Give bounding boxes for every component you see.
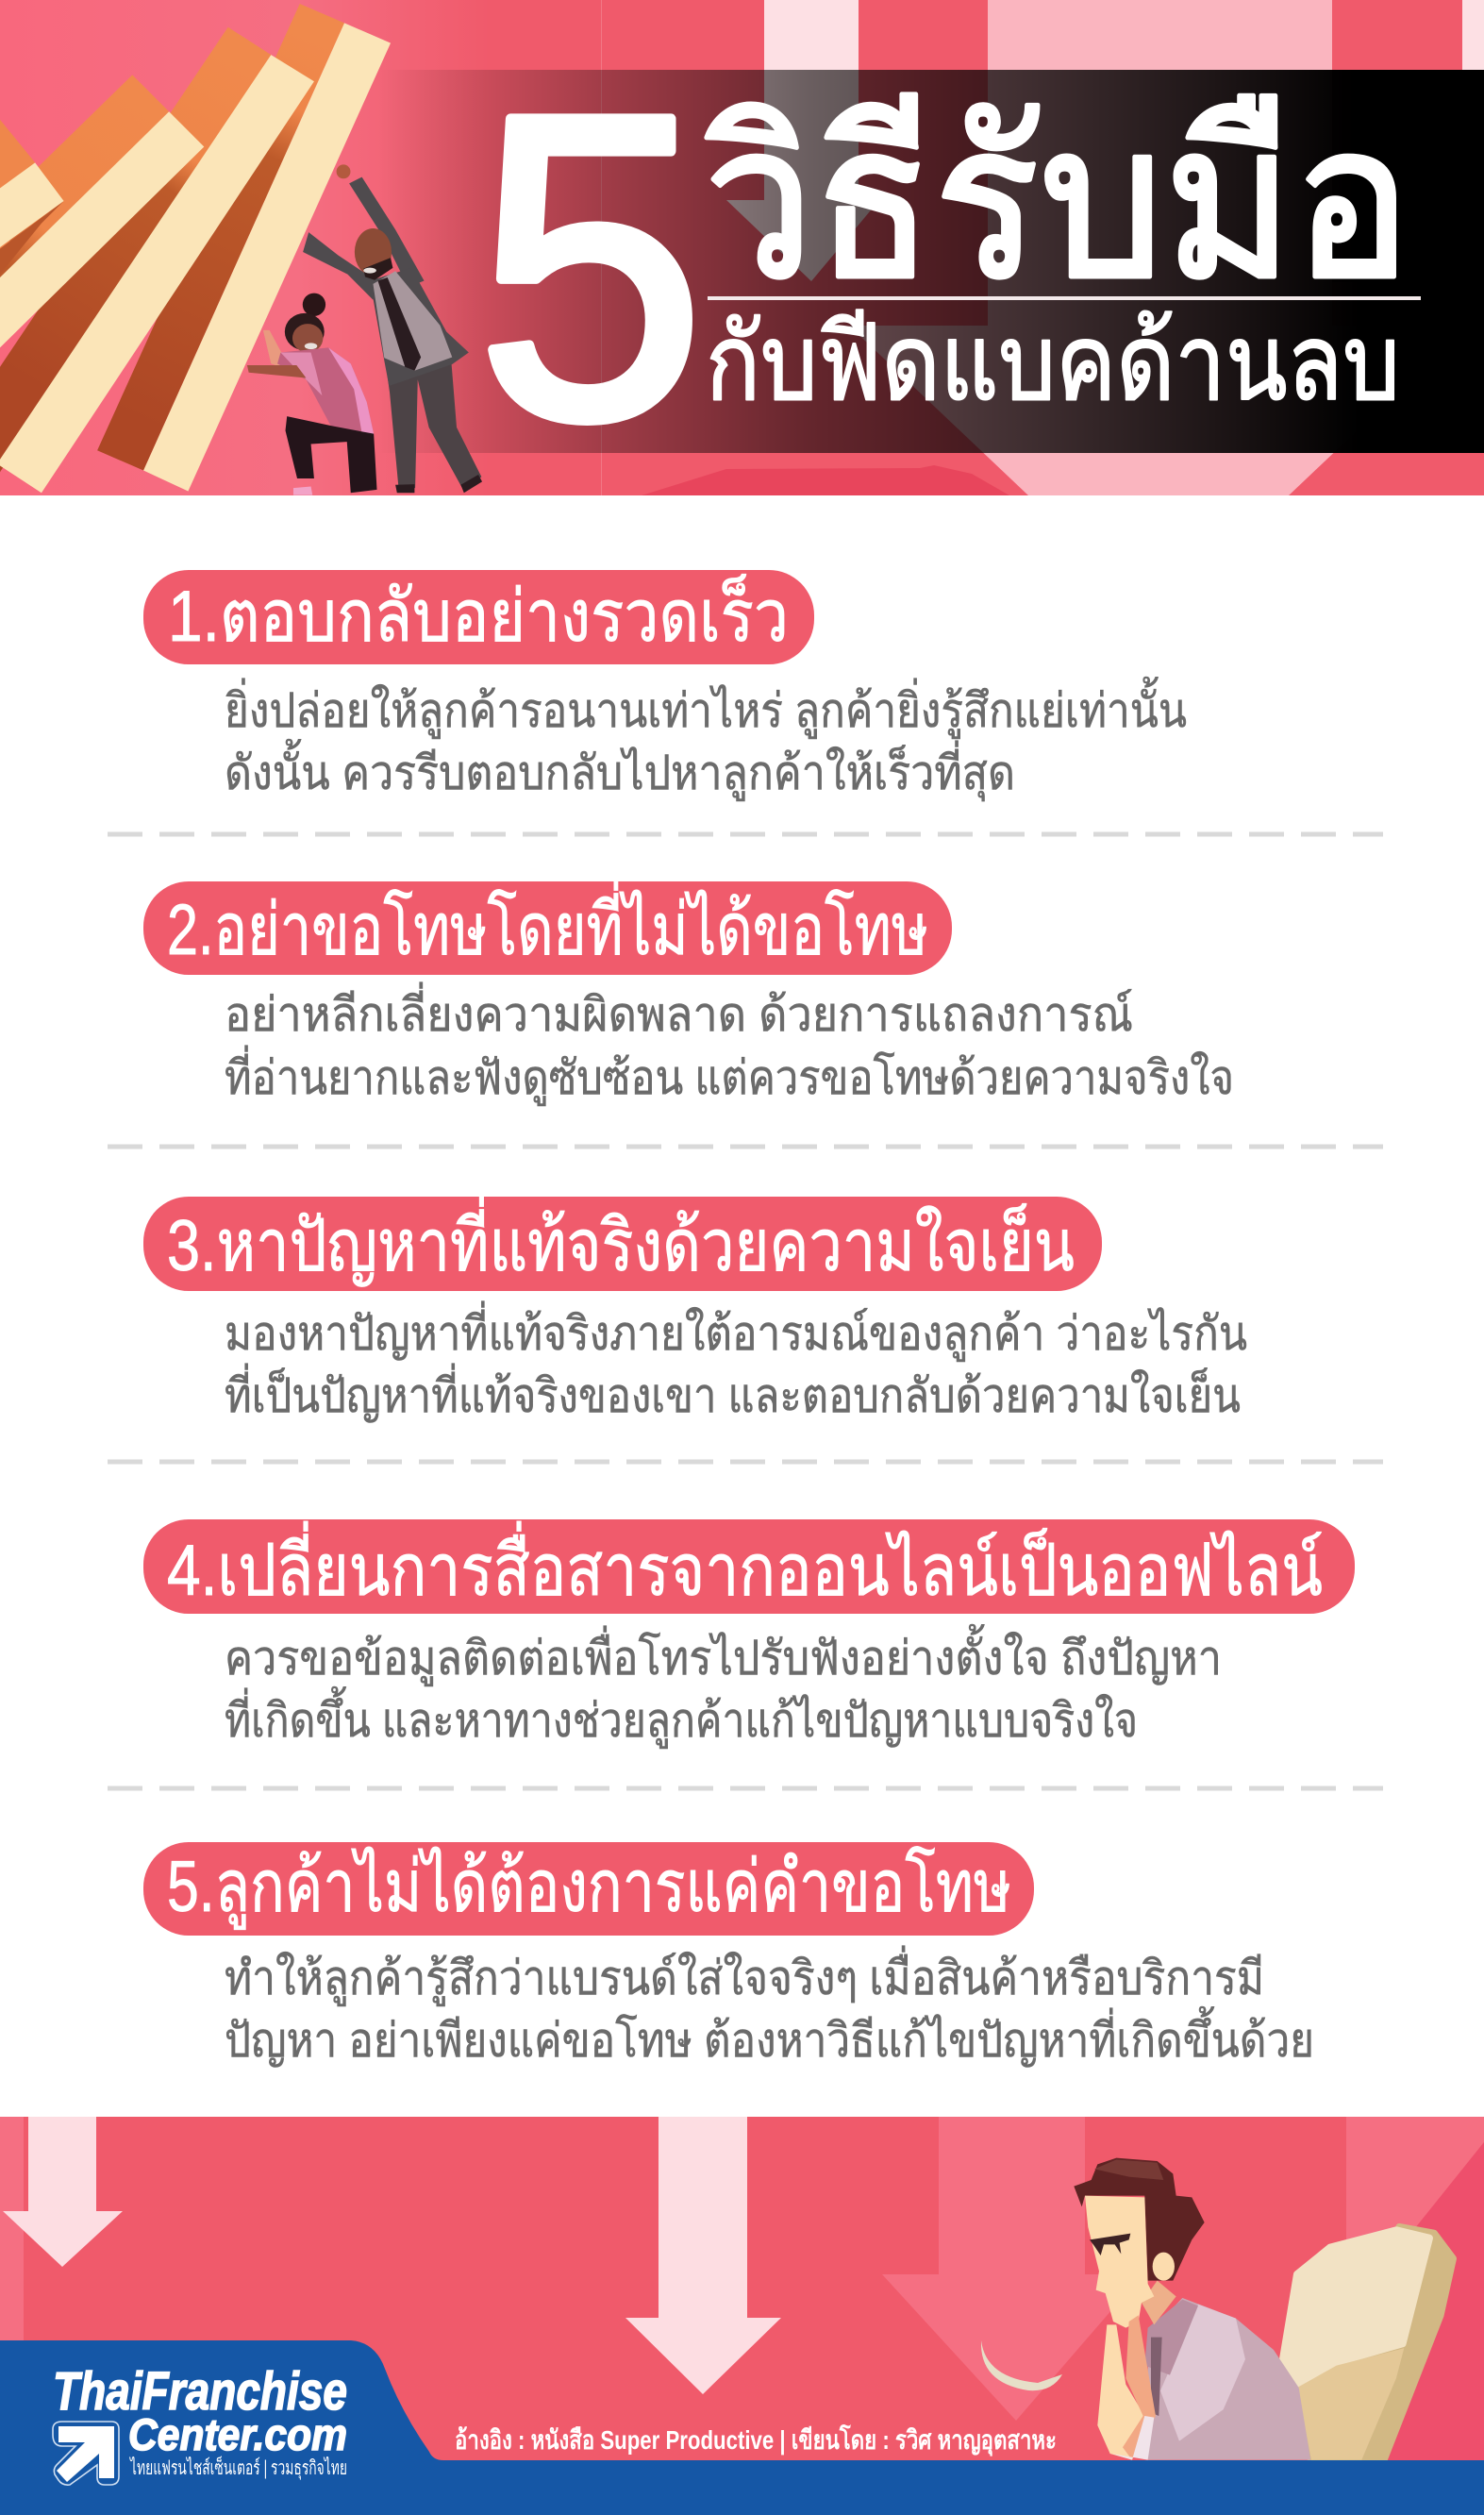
body text 1 <box>225 677 1187 801</box>
dark title band <box>0 70 1484 453</box>
title: main line: วิธีรับมือ <box>704 83 1411 323</box>
body text 3: ที่เป็นปัญหาที่แท้จริงของเขา และตอบกลับด้วยความใจเย็น <box>225 1364 1241 1422</box>
body text 4: ที่เกิดขึ้น และหาทางช่วยลูกค้าแก้ไขปัญหาแบบจริงใจ <box>225 1686 1138 1749</box>
icon: large pale down arrow <box>849 0 1468 495</box>
heading pill 1: 1.ตอบกลับอย่างรวดเร็ว <box>168 574 789 657</box>
panel: item 5 <box>143 1842 1314 2067</box>
icon: pale down arrow centre <box>625 2117 781 2394</box>
icon: logo arrow <box>53 2422 119 2485</box>
icon: small pale down arrow <box>726 0 879 281</box>
body text 3 <box>225 1301 1247 1422</box>
body text 5: ปัญหา อย่าเพียงแค่ขอโทษ ต้องหาวิธีแก้ไขปัญหาที่เกิดขึ้นด้วย <box>225 2006 1314 2067</box>
panel: item 3 <box>143 1197 1247 1422</box>
heading pill 3: 3.หาปัญหาที่แท้จริงด้วยความใจเย็น <box>167 1197 1075 1286</box>
big number five: 5 <box>476 25 705 508</box>
body text 5: ทำให้ลูกค้ารู้สึกว่าแบรนด์ใส่ใจจริงๆ เมื่อสินค้าหรือบริการมี <box>225 1946 1264 2006</box>
heading pill 5: 5.ลูกค้าไม่ได้ต้องการแค่คำขอโทษ <box>167 1846 1011 1930</box>
panel: item 1 <box>143 570 1187 801</box>
icon: pale down arrow left <box>3 2117 123 2267</box>
body text 2: อย่าหลีกเลี่ยงความผิดพลาด ด้วยการแถลงการณ์ <box>225 982 1133 1041</box>
panel: item 2 <box>143 880 1234 1106</box>
body text 4: ควรขอข้อมูลติดต่อเพื่อโทรไปรับฟังอย่างตั้งใจ ถึงปัญหา <box>225 1624 1222 1686</box>
footer credit line: อ้างอิง : หนังสือ Super Productive | เขียนโดย : รวิศ หาญอุตสาหะ <box>455 2423 1057 2456</box>
panel: footer banner <box>0 2117 1484 2515</box>
body text 4 <box>225 1624 1222 1749</box>
illustration: falling dominoes <box>0 4 391 493</box>
illustration: thinking man in armchair <box>1074 2158 1453 2460</box>
panel: header banner <box>0 0 1484 508</box>
illustration: woman pushing dominoes <box>247 293 377 495</box>
icon: crescent shape <box>981 2340 1062 2390</box>
body text 2: ที่อ่านยากและฟังดูซับซ้อน แต่ควรขอโทษด้วยความจริงใจ <box>225 1046 1234 1106</box>
body text 2 <box>225 982 1234 1106</box>
title divider <box>708 296 1421 300</box>
panel: item 4 <box>143 1519 1355 1749</box>
logo: ThaiFranchiseCenter.com: Center.com <box>128 2409 347 2459</box>
logo: ThaiFranchiseCenter.com: ไทยแฟรนไชส์เซ็นเตอร์ | รวมธุรกิจไทย <box>129 2455 347 2480</box>
logo: ThaiFranchiseCenter.com: ThaiFranchise <box>53 2361 347 2422</box>
heading pill 2: 2.อย่าขอโทษโดยที่ไม่ได้ขอโทษ <box>167 880 928 970</box>
body text 1: ยิ่งปล่อยให้ลูกค้ารอนานเท่าไหร่ ลูกค้ายิ่งรู้สึกแย่เท่านั้น <box>225 677 1187 739</box>
body text 5 <box>225 1946 1314 2067</box>
heading pill 2 <box>143 880 952 975</box>
icon: faint down arrow behind figure <box>882 2117 1142 2421</box>
body text 3: มองหาปัญหาที่แท้จริงภายใต้อารมณ์ของลูกค้า ว่าอะไรกัน <box>225 1301 1247 1362</box>
body text 1: ดังนั้น ควรรีบตอบกลับไปหาลูกค้าให้เร็วที่สุด <box>225 739 1015 801</box>
logo: ThaiFranchiseCenter.com <box>53 2361 347 2485</box>
footer blue bar and logo plate <box>0 2340 1484 2515</box>
illustration: man pushing dominoes <box>303 164 482 493</box>
